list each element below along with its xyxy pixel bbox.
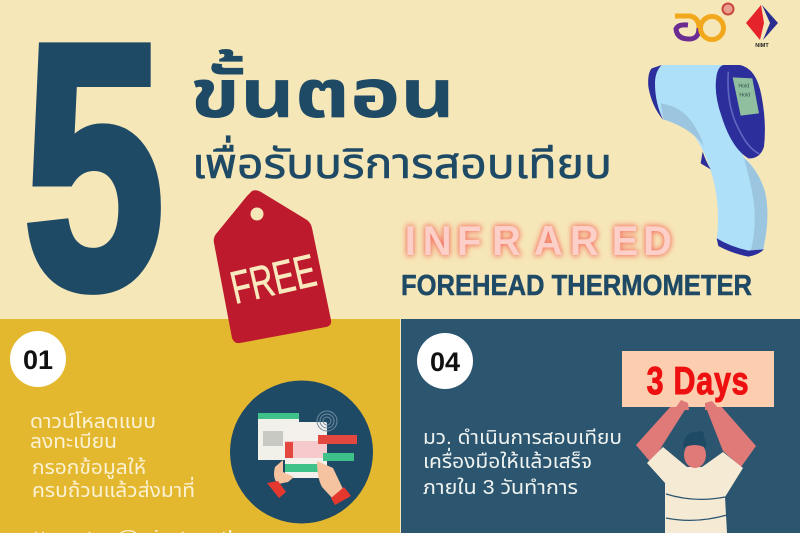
- logos: [675, 4, 778, 49]
- icon: infrared thermometer: [648, 65, 767, 257]
- forehead thermometer heading: FOREHEAD THERMOMETER: [401, 270, 752, 302]
- step 04 text: [423, 427, 622, 499]
- icon: hands holding tablet: [230, 380, 373, 524]
- thermometer display: Hold: [738, 83, 749, 89]
- tag label: FREE: [226, 245, 321, 314]
- step 01 text: [30, 411, 241, 533]
- panel: step 04: [401, 319, 800, 533]
- sign: 3 days: 3 Days: [647, 359, 749, 403]
- title line 2: เพื่อรับบริการสอบเทียบ: [192, 135, 612, 187]
- tag hole: [250, 208, 264, 220]
- thermometer display: [733, 77, 759, 116]
- hands on sign: [674, 400, 720, 410]
- logo: anniversary mark: [675, 4, 734, 40]
- title line 1: ขั้นตอน: [190, 48, 455, 132]
- step 01 text: ดาวน์โหลดแบบ: [30, 411, 156, 433]
- step badge 04: [417, 333, 473, 389]
- step 04 text: ภายใน 3 วันทำการ: [423, 477, 578, 499]
- infrared heading: INFRARED: [405, 217, 672, 264]
- step badge 04: 04: [430, 347, 460, 377]
- illustration: person holding sign: [636, 405, 756, 533]
- panel: step 01: [0, 319, 400, 533]
- free price tag: [214, 190, 331, 343]
- step badge 01: 01: [23, 345, 53, 375]
- step 01 text: กรอกข้อมูลให้: [32, 456, 146, 480]
- step 04 text: เครื่องมือให้แล้วเสร็จ: [423, 447, 592, 473]
- thermometer display: Hold: [739, 93, 750, 99]
- sign: 3 days: [622, 351, 774, 410]
- logo: NIMT: NIMT: [755, 43, 769, 49]
- infrared heading: INFRARED: [405, 217, 672, 264]
- step 01 text: ลงทะเบียน: [30, 431, 117, 453]
- step 01 text: ครบถ้วนแล้วส่งมาที่: [32, 476, 195, 502]
- title: [190, 48, 612, 187]
- step badge 01: [10, 331, 66, 387]
- step 04 text: มว. ดำเนินการสอบเทียบ: [423, 427, 622, 449]
